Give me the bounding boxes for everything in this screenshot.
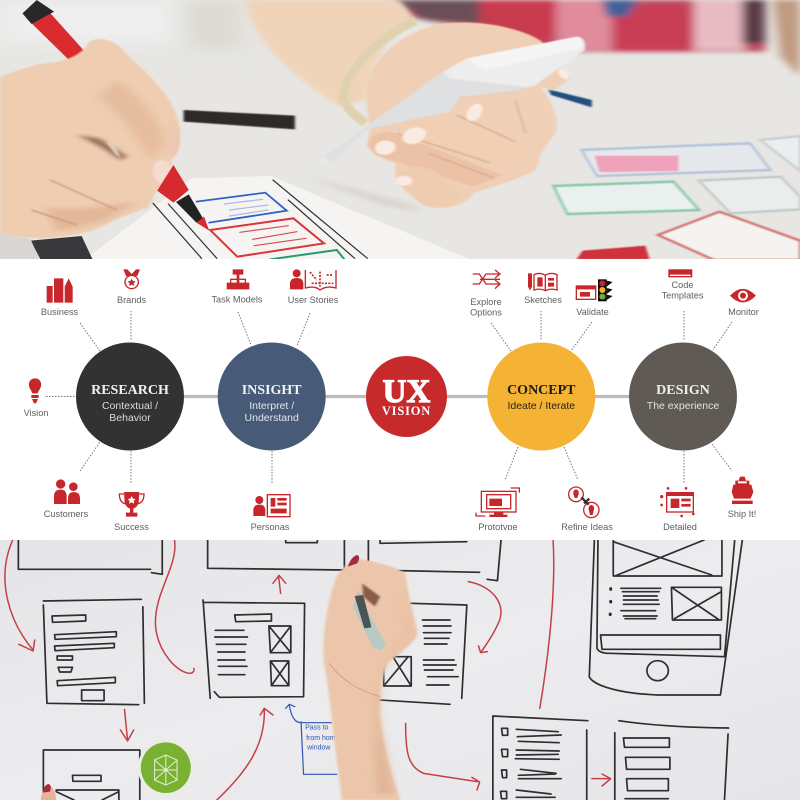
circle: concept [487,342,595,450]
wireframe: top left partial [18,540,162,574]
icon: success trophy [119,492,144,517]
notebook spiral [31,236,93,260]
icon: validate traffic light and window [576,279,613,301]
label: Success: Success [114,522,149,532]
circle: UX vision [366,356,447,437]
label: Code Templates: Code [672,280,693,290]
marker [353,589,386,650]
label: Prototype: Prototype [478,522,518,532]
cards on table [554,136,800,260]
icon: task models org chart [227,269,249,289]
hand shading [375,583,411,793]
wireframe: page behind hand [380,603,467,704]
circle: insight: Interpret / [249,400,294,412]
wireframe: form page [43,599,144,705]
icon: prototype screen with arrows [476,488,519,517]
circle: design [629,342,737,450]
circle: UX vision: UX [383,374,430,410]
phone [323,37,585,163]
fingernails [371,67,572,187]
pen cap [22,0,54,24]
background: forearm [245,0,413,107]
label: Sketches: Sketches [524,295,562,305]
circle: concept: Ideate / Iterate [507,400,575,412]
photo: hands sketching wireframes with a phone [0,0,800,260]
circle: insight: INSIGHT [242,383,302,398]
label: Validate: Validate [576,307,609,317]
label: User Stories: User Stories [288,295,339,305]
icon: vision light bulb [29,378,41,403]
wireframe: bottom left envelope page [43,750,140,800]
icon: monitor eye [730,289,756,302]
left hand [0,39,180,238]
icon: ship [732,477,753,504]
white pen sliver [106,142,121,159]
icons: left half [29,269,336,517]
wireframe: article page with images [203,600,305,698]
nail [348,555,359,567]
panel: UX process diagram [24,269,759,530]
green sticker [138,739,194,796]
red pen barrel [26,14,84,60]
red flow arrows [5,540,611,800]
label: Vision: Vision [24,408,48,418]
dotted connectors [46,311,732,483]
label: Code Templates: Templates [662,290,704,300]
circle: research [76,342,184,450]
wireframe: top center partials [208,540,501,581]
label: Explore Options: Options [470,307,502,317]
circle: UX vision: VISION [382,404,431,418]
wireframe: list page [493,716,588,800]
label: Customers: Customers [44,509,89,519]
blue pen on table [548,89,592,107]
circle: insight [218,342,326,450]
back of hand [366,23,570,208]
icon: user stories person and book [290,269,336,290]
icon: detailed wireframe window [660,487,695,517]
blue note with arrow: window [306,744,331,751]
label: Detailed: Detailed [663,522,697,532]
label: Brands: Brands [117,295,146,305]
blue note with arrow: from home [306,735,340,742]
circle: concept: CONCEPT [507,383,576,398]
black marker on table [184,110,295,129]
wireframe: mobile phone [589,540,742,695]
icon: business buildings [47,278,73,303]
hand shading [32,80,166,232]
pen nib [157,165,209,231]
background: plaid shirt [393,0,765,52]
timeline connector [130,395,683,398]
icon: code templates [668,269,692,277]
icon: brands medal [123,269,140,289]
hand holding marker [323,555,417,800]
background: right arm [773,0,800,77]
label: Personas: Personas [251,522,290,532]
icon: customers people [54,479,80,504]
label: Ship It!: Ship It! [728,509,756,519]
label: Monitor: Monitor [728,307,759,317]
circle: insight: Understand [245,412,299,424]
red block [577,246,649,259]
label: Business: Business [41,307,79,317]
icon: sketches book [528,273,557,291]
circle: research: Behavior [109,412,151,424]
circle: research: Contextual / [102,400,158,412]
wireframe drawing [153,180,367,259]
icon: explore options shuffle arrows [473,270,500,289]
circle: design: The experience [647,400,719,412]
wireframe: button list page [615,721,729,800]
label: Refine Ideas: Refine Ideas [561,522,613,532]
fingertip bottom left [41,784,56,800]
circle: research: RESEARCH [91,383,169,398]
icon: refine ideas [569,487,599,518]
bracelet [343,21,416,123]
paper sheet [84,176,472,260]
nails [152,134,180,185]
right hand [366,23,570,208]
right hand fingers [367,86,556,208]
circle: design: DESIGN [656,383,710,398]
blue note with arrow [286,704,340,774]
icon: personas profile card [253,495,290,517]
icons: right half [473,269,756,518]
photo: hand drawing wireframes on a whiteboard [0,540,800,800]
label: Task Models: Task Models [211,294,263,304]
blue note with arrow: Pass to [305,724,329,731]
label: Explore Options: Explore [470,297,502,307]
